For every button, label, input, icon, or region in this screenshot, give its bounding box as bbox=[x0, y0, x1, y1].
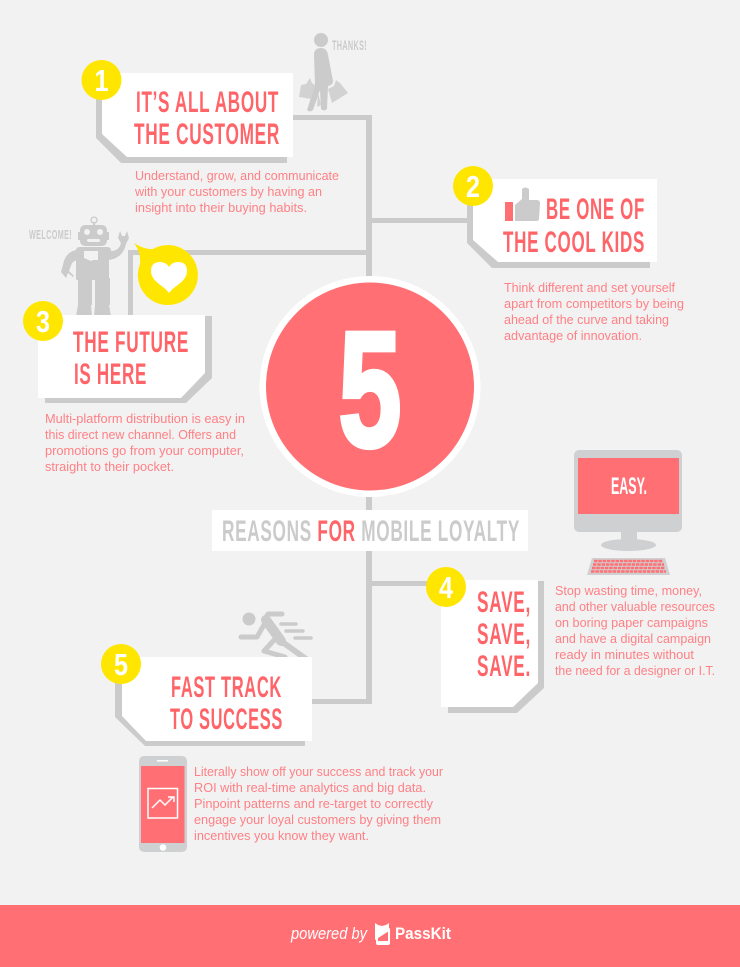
label: easy: EASY. bbox=[611, 473, 647, 500]
heading 3 bbox=[73, 326, 189, 391]
panel 5: fast track to success bbox=[101, 644, 312, 746]
heading 1: IT’S ALL ABOUT bbox=[136, 86, 279, 119]
badge 1 bbox=[82, 60, 122, 100]
label: thanks: THANKS! bbox=[332, 37, 367, 53]
text: cool kids description: apart from competitors by being bbox=[504, 296, 684, 311]
text: save description: Stop wasting time, money, bbox=[555, 583, 702, 598]
label: welcome: WELCOME! bbox=[29, 227, 72, 242]
heading 4 bbox=[477, 586, 531, 683]
text: cool kids description: Think different and set yourself bbox=[504, 280, 675, 295]
heading 3: THE FUTURE bbox=[73, 326, 189, 359]
heading 3: IS HERE bbox=[74, 358, 147, 391]
text: customer description: with your customers by having an bbox=[134, 184, 322, 199]
heading 2 bbox=[503, 193, 645, 259]
badge 2 bbox=[453, 166, 493, 206]
text: save description: ready in minutes without bbox=[555, 647, 694, 662]
panel 1: it's all about the customer bbox=[82, 60, 293, 163]
badge 2: 2 bbox=[466, 169, 480, 204]
title band: reasons for mobile loyalty bbox=[212, 510, 528, 551]
text: future description: this direct new channel. Offers and bbox=[45, 427, 236, 442]
text: save description: and other valuable resources bbox=[555, 599, 715, 614]
badge 4: 4 bbox=[439, 570, 454, 605]
text: save description: on boring paper campaigns bbox=[555, 615, 708, 630]
text: save description bbox=[555, 583, 715, 678]
central circle with number 5 bbox=[260, 276, 480, 497]
text: fast track description: ROI with real-time analytics and big data. bbox=[194, 780, 426, 795]
title band: reasons for mobile loyalty: REASONS FOR MOBILE LOYALTY bbox=[222, 515, 520, 548]
connector lines bbox=[128, 115, 472, 704]
heading 1 bbox=[134, 86, 280, 151]
text: fast track description bbox=[194, 764, 444, 843]
icon: thumbs up bbox=[505, 188, 540, 221]
text: future description bbox=[45, 411, 245, 474]
central circle with number 5: 5 bbox=[338, 298, 402, 481]
panel 3: the future is here bbox=[23, 301, 212, 403]
badge 3: 3 bbox=[36, 304, 50, 339]
icon: shopper with bags bbox=[299, 33, 348, 112]
text: customer description bbox=[134, 168, 339, 215]
badge 4 bbox=[426, 567, 466, 607]
text: cool kids description bbox=[504, 280, 684, 343]
icon: running person bbox=[241, 612, 311, 659]
panel 4: save, save, save bbox=[426, 567, 544, 713]
heading 4: SAVE, bbox=[477, 618, 531, 651]
heading 5: FAST TRACK bbox=[171, 671, 282, 704]
text: fast track description: Literally show off your success and track your bbox=[194, 764, 444, 779]
text: customer description: insight into their buying habits. bbox=[135, 200, 307, 215]
badge 3 bbox=[23, 301, 63, 341]
badge 5: 5 bbox=[114, 647, 128, 682]
text: fast track description: Pinpoint patterns and re-target to correctly bbox=[194, 796, 433, 811]
heading 4: SAVE, bbox=[477, 586, 531, 619]
heading 2: BE ONE OF bbox=[546, 193, 645, 226]
heading 1: THE CUSTOMER bbox=[134, 118, 280, 151]
text: future description: promotions go from your computer, bbox=[45, 443, 244, 458]
footer bar bbox=[0, 905, 740, 967]
text: cool kids description: ahead of the curve and taking bbox=[504, 312, 669, 327]
icon: robot bbox=[61, 217, 129, 316]
panel 2: be one of the cool kids bbox=[453, 166, 657, 268]
text: future description: straight to their pocket. bbox=[45, 459, 174, 474]
text: fast track description: incentives you know they want. bbox=[194, 828, 369, 843]
text: future description: Multi-platform distribution is easy in bbox=[45, 411, 245, 426]
icon: PassKit logo bbox=[375, 923, 390, 945]
footer text: PassKit: PassKit bbox=[395, 924, 451, 943]
heading 5: TO SUCCESS bbox=[170, 703, 283, 736]
footer text: powered by: powered by bbox=[290, 924, 368, 943]
heading 5 bbox=[170, 671, 283, 736]
icon: heart speech bubble bbox=[134, 243, 198, 305]
text: cool kids description: advantage of innovation. bbox=[504, 328, 642, 343]
badge 5 bbox=[101, 644, 141, 684]
icon: smartphone with chart bbox=[139, 756, 187, 852]
text: save description: and have a digital campaign bbox=[555, 631, 711, 646]
badge 1: 1 bbox=[94, 63, 108, 98]
text: customer description: Understand, grow, and communicate bbox=[135, 168, 339, 183]
text: fast track description: engage your loyal customers by giving them bbox=[194, 812, 441, 827]
heading 4: SAVE. bbox=[477, 650, 531, 683]
icon: desktop computer bbox=[574, 450, 682, 575]
text: save description: the need for a designer or I.T. bbox=[555, 663, 715, 678]
